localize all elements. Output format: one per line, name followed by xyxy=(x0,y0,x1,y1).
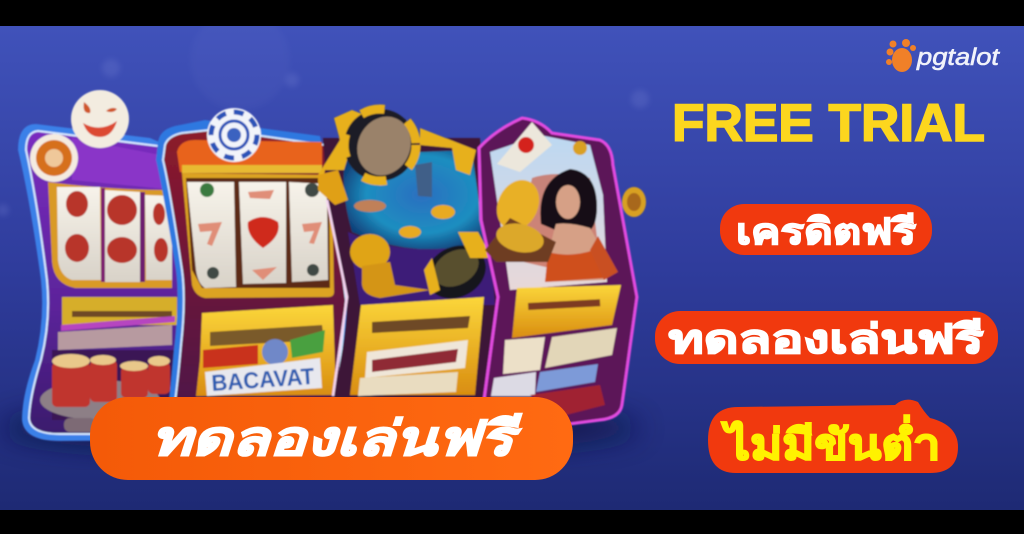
machine 1: purple slot xyxy=(18,124,200,441)
machine 2: red slot: BACAVAT xyxy=(211,363,315,396)
pill: free credit: เครดิตฟรี xyxy=(736,211,917,252)
pill: free trial play xyxy=(655,311,998,364)
logo: pgtalot xyxy=(916,44,1001,71)
icon: blue poker chip xyxy=(207,108,261,162)
title: FREE TRIAL xyxy=(672,94,985,153)
background bokeh xyxy=(0,10,649,216)
button: orange pill: ทดลองเล่นฟรี xyxy=(151,413,522,466)
machine shadow xyxy=(0,402,640,454)
pill: free credit xyxy=(720,204,932,255)
icon: smiley chip xyxy=(71,90,129,148)
pill: no minimum xyxy=(708,400,958,473)
slot machines illustration xyxy=(18,90,646,441)
machine 2: red slot xyxy=(156,120,352,410)
icon: orange poker chip xyxy=(30,134,78,182)
button: orange pill xyxy=(90,397,573,480)
machine 3: ocean slot xyxy=(323,138,499,400)
icon: paw xyxy=(886,39,916,72)
top letterbox bar xyxy=(0,0,1024,26)
machine 4: woman slot xyxy=(479,118,637,424)
pill: free trial play: ทดลองเล่นฟรี xyxy=(668,318,984,362)
gold and black chips: machine 3 xyxy=(318,108,495,309)
pill: no minimum: ไม่มีขันต่ำ xyxy=(721,415,940,468)
machine 2 neon edge xyxy=(327,200,347,396)
icon: floating gold chip xyxy=(622,187,646,217)
logo xyxy=(886,39,1001,72)
bottom letterbox bar xyxy=(0,510,1024,534)
